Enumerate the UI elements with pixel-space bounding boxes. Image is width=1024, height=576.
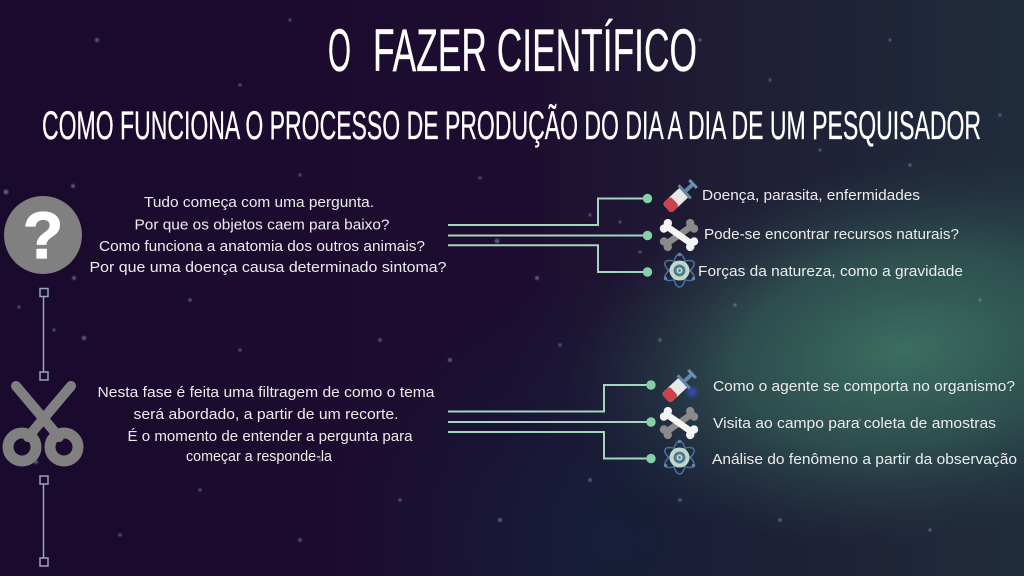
text block: first question: Como funciona a anatomia dos outros animais? [99, 239, 425, 255]
icon: scissors [8, 386, 78, 461]
text block: second stage: será abordado, a partir de um recorte. [134, 407, 398, 423]
text block: first question: Tudo começa com uma pergunta. [144, 195, 374, 211]
icon: atom [662, 440, 697, 474]
icon: question mark circle [4, 196, 82, 274]
text block: first question [90, 195, 446, 276]
text block: first question: Por que os objetos caem para baixo? [134, 218, 390, 234]
label: forces of nature: Forças da natureza, como a gravidade [698, 264, 963, 280]
label: disease: Doença, parasita, enfermidades [702, 188, 920, 204]
icon: bones [658, 405, 700, 441]
text block: first question: Por que uma doença causa determinado sintoma? [90, 260, 446, 276]
label: natural resources: Pode-se encontrar recursos naturais? [704, 227, 959, 243]
connector: scissors downward [40, 476, 48, 566]
text block: second stage: Nesta fase é feita uma filtragem de como o tema [98, 385, 435, 401]
icon: atom [662, 253, 697, 287]
text block: second stage: É o momento de entender a pergunta para [128, 428, 413, 445]
label: agent behaviour: Como o agente se comporta no organismo? [713, 379, 1015, 395]
title: O [328, 17, 351, 84]
branch connector: second stage [448, 380, 656, 463]
icon: bones [658, 217, 700, 253]
label: field visit: Visita ao campo para coleta de amostras [713, 416, 996, 432]
text block: second stage [98, 385, 435, 465]
label: phenomenon analysis: Análise do fenômeno a partir da observação [712, 452, 1017, 468]
text block: second stage: começar a responde-la [186, 449, 333, 465]
title [328, 17, 697, 84]
icon: question mark circle: ? [23, 198, 63, 272]
branch connector: first stage [448, 194, 652, 277]
connector: question to scissors [40, 288, 48, 380]
icon: syringe [660, 366, 699, 405]
title: FAZER CIENTÍFICO [373, 17, 697, 84]
icon: syringe [661, 176, 700, 215]
